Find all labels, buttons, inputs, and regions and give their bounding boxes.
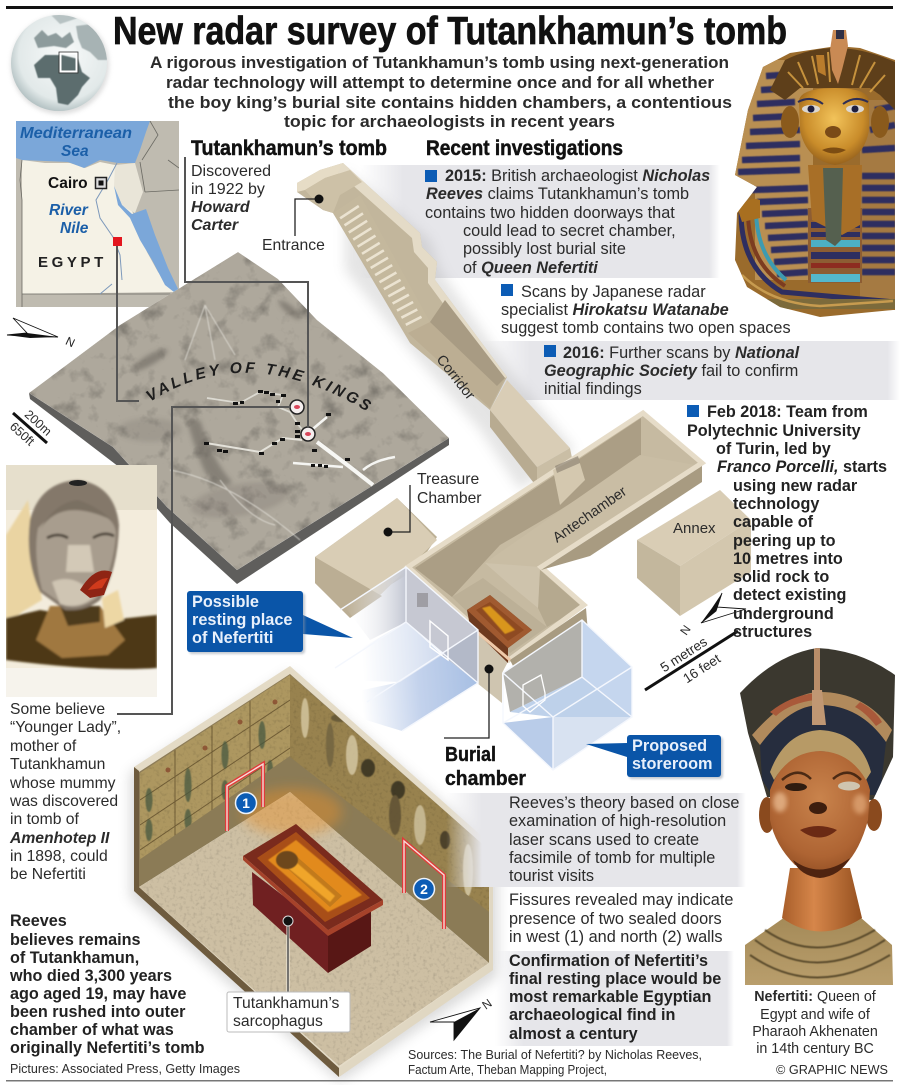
text: Feb 2018 team: structures <box>733 623 812 641</box>
icon: north arrow upper left: N <box>63 334 77 350</box>
text: fissures note: Fissures revealed may indicate <box>509 891 733 909</box>
headcloth top <box>770 48 895 110</box>
wall outer side <box>541 466 702 570</box>
text: theory note <box>509 794 740 885</box>
scale bar: tomb: 16 feet <box>680 651 723 686</box>
shaded corridor wall <box>430 300 505 386</box>
text: Feb 2018 team: Feb 2018: Team from <box>707 403 868 421</box>
text: discovered by Howard Carter: in 1922 by <box>191 181 265 198</box>
leader lines from heading and map to terrain <box>117 157 308 714</box>
text: Feb 2018 team: Polytechnic University <box>687 422 861 440</box>
door 2 <box>404 841 444 929</box>
text: Younger Lady note: Some believe <box>10 701 105 718</box>
text: Reeves believes: been rushed into outer <box>10 1003 186 1021</box>
text: theory note: Reeves’s theory based on close <box>509 794 740 812</box>
intro text: topic for archaeologists in recent years <box>284 113 615 131</box>
credit: pictures: Pictures: Associated Press, Getty Images <box>10 1062 240 1076</box>
icon: north arrow lower <box>430 996 495 1040</box>
credit: sources: Factum Arte, Theban Mapping Project, <box>408 1063 607 1077</box>
text: 2015 investigation: possibly lost burial site <box>463 240 626 258</box>
heading: Tutankhamun's tomb: Tutankhamun’s tomb <box>191 137 387 160</box>
chest collar <box>808 208 862 283</box>
text: Feb 2018 team: 10 metres into <box>733 550 843 568</box>
staircase <box>333 195 430 333</box>
diagram: tomb corridor <box>295 163 575 490</box>
scale bar: tomb: 5 metres <box>658 634 710 675</box>
text: 2015 investigation: Reeves claims Tutankhamun’s tomb <box>426 185 689 203</box>
neck <box>808 165 862 235</box>
text: 2015 investigation <box>425 167 710 277</box>
text: Reeves believes: chamber of what was <box>10 1021 174 1039</box>
caption: Nefertiti: in 14th century BC <box>756 1041 874 1057</box>
corridor outer wall <box>297 163 507 410</box>
text: Younger Lady note: Tutankhamun <box>10 756 105 773</box>
text: confirmation note: most remarkable Egyptian <box>509 988 711 1006</box>
text: 2015 investigation: could lead to secret chamber, <box>463 222 676 240</box>
cap band <box>770 730 871 780</box>
map labels: Sea <box>61 143 89 160</box>
callout: possible resting place of Nefertiti: of Nefertiti <box>192 629 273 647</box>
text: Younger Lady note: be Nefertiti <box>10 866 86 883</box>
left wall <box>139 674 290 887</box>
right wall <box>290 674 489 963</box>
burial floor front <box>477 630 510 703</box>
text: Feb 2018 team: underground <box>733 605 834 623</box>
text: Feb 2018 team: using new radar <box>733 477 858 495</box>
label: Annex: Annex <box>673 520 716 537</box>
map: Red Sea <box>114 186 179 296</box>
text: Younger Lady note: in tomb of <box>10 811 80 828</box>
caption: Nefertiti: Pharaoh Akhenaten <box>752 1024 878 1040</box>
icon: locator globe <box>11 12 109 114</box>
map labels: River <box>49 202 89 219</box>
map: Mediterranean Sea <box>16 121 150 168</box>
text: discovered by Howard Carter: Howard <box>191 199 251 216</box>
text: Watanabe scans: suggest tomb contains two open spaces <box>501 319 791 337</box>
text: Younger Lady note: whose mummy <box>9 775 116 792</box>
icon: north arrow upper left <box>7 318 77 350</box>
block passage <box>490 380 570 467</box>
map: Egypt land <box>22 160 175 294</box>
floor of tomb rooms <box>408 413 702 660</box>
caption: Nefertiti: Nefertiti: Queen of <box>754 989 876 1005</box>
text: theory note: facsimile of tomb for multiple <box>509 849 715 867</box>
scale bar: terrain: 200m <box>22 407 54 439</box>
map: Egypt locator <box>16 121 179 307</box>
text: Reeves believes <box>9 912 205 1057</box>
text: Watanabe scans: Scans by Japanese radar <box>521 283 706 301</box>
intro text: the boy king’s burial site contains hidden chambers, a contentious <box>168 94 732 112</box>
text: Feb 2018 team: Franco Porcelli, starts <box>717 458 887 476</box>
text: theory note: laser scans used to create <box>509 831 699 849</box>
text: theory note: examination of high-resolution <box>509 812 726 830</box>
text: Feb 2018 team: detect existing <box>733 586 846 604</box>
annex side wall <box>485 455 695 568</box>
text: fissures note: presence of two sealed doors <box>509 910 722 928</box>
callout: possible resting place of Nefertiti: Possible <box>192 593 259 611</box>
text: confirmation note: final resting place would be <box>509 970 721 988</box>
photo: Nefertiti bust <box>738 645 898 985</box>
text: discovered by Howard Carter: Carter <box>191 217 239 234</box>
label: Burial chamber: Burial <box>445 744 496 766</box>
text: Younger Lady note <box>9 701 121 883</box>
label dot: Entrance <box>295 194 324 236</box>
text: Younger Lady note: in 1898, could <box>10 848 108 865</box>
text: 2016 scans <box>544 344 800 398</box>
text: Feb 2018 team: of Turin, led by <box>716 440 831 458</box>
intro text <box>150 54 732 131</box>
diagram: antechamber <box>408 413 702 703</box>
icon: north arrow right <box>677 593 746 638</box>
cobra and vulture <box>816 30 848 84</box>
text: Feb 2018 team <box>687 403 887 641</box>
text: Younger Lady note: Amenhotep II <box>9 830 110 847</box>
credit: sources <box>408 1048 702 1077</box>
eyes and lips <box>773 773 867 838</box>
text: Feb 2018 team: peering up to <box>733 532 836 550</box>
room floor <box>139 792 489 1066</box>
label: Burial chamber <box>444 664 526 790</box>
credit: sources: Sources: The Burial of Nefertiti? by Nicholas Reeves, <box>408 1048 702 1062</box>
label: Valley of the Kings <box>150 373 395 430</box>
bottom rule <box>6 1080 893 1082</box>
panel: terrain block Valley of the Kings: VALLEY OF THE KINGS <box>146 362 372 410</box>
text: confirmation note: Confirmation of Nefertiti’s <box>509 952 708 970</box>
text: confirmation note: almost a century <box>509 1025 638 1043</box>
callout: possible resting place of Nefertiti: resting place <box>192 611 292 629</box>
label: Treasure Chamber: Chamber <box>417 490 482 507</box>
text: discovered by Howard Carter <box>191 163 271 234</box>
callout: proposed storeroom: storeroom <box>632 755 713 773</box>
label: Treasure Chamber: Treasure <box>417 471 479 488</box>
callout: proposed storeroom <box>586 735 723 779</box>
panel: terrain block Valley of the Kings <box>29 252 449 584</box>
text: Younger Lady note: “Younger Lady”, <box>10 719 121 736</box>
far wall <box>415 418 641 597</box>
sarcophagus, small <box>467 595 532 663</box>
text: 2015 investigation: of Queen Nefertiti <box>463 259 598 277</box>
face <box>770 751 870 870</box>
photo: Tutankhamun golden mask <box>733 30 900 320</box>
diagram: annex block <box>637 490 751 616</box>
door 1: 1 <box>242 795 250 811</box>
text: Reeves believes: believes remains <box>10 931 140 949</box>
label: Antechamber: Antechamber <box>550 484 630 546</box>
text: confirmation note <box>509 952 721 1043</box>
map labels <box>20 125 132 271</box>
tomb tracks and markers <box>204 390 395 485</box>
caption: Nefertiti: Egypt and wife of <box>760 1007 870 1023</box>
text: Feb 2018 team: capable of <box>733 513 814 531</box>
text: 2015 investigation: contains two hidden doorways that <box>425 204 675 222</box>
wall rim <box>408 413 702 660</box>
top rule <box>6 6 893 9</box>
text: confirmation note: archaeological find in <box>509 1006 675 1024</box>
corridor floor <box>408 322 505 408</box>
map labels: Mediterranean <box>20 125 132 142</box>
label: Tutankhamun's sarcophagus <box>227 916 350 1032</box>
label: Tutankhamun's sarcophagus: Tutankhamun’s <box>233 995 340 1012</box>
text: Younger Lady note: mother of <box>10 738 77 755</box>
label: Tutankhamun's sarcophagus: sarcophagus <box>233 1013 323 1030</box>
text: discovered by Howard Carter: Discovered <box>191 163 271 180</box>
door 2: 2 <box>420 881 428 897</box>
text: fissures note: in west (1) and north (2) walls <box>509 928 723 946</box>
panel: grey text bands <box>446 793 746 1046</box>
text: theory note: tourist visits <box>509 867 594 885</box>
scale bar: tomb <box>645 631 738 690</box>
burial room floor <box>452 578 547 653</box>
text: 2016 scans: initial findings <box>544 380 642 398</box>
text: Watanabe scans: specialist Hirokatsu Watanabe <box>501 301 729 319</box>
title: New radar survey of Tutankhamun’s tomb <box>113 10 787 53</box>
intro text: radar technology will attempt to determine once and for all whether <box>166 74 715 92</box>
map labels: Nile <box>60 220 89 237</box>
diagram: treasure chamber block <box>315 498 437 618</box>
text: Reeves believes: ago aged 19, may have <box>10 985 186 1003</box>
room dark outer edge <box>134 767 339 1077</box>
mask face <box>781 88 889 246</box>
caption: Nefertiti <box>752 989 878 1057</box>
door 1 <box>227 764 263 831</box>
text: 2016 scans: Geographic Society fail to confirm <box>544 362 798 380</box>
text: Younger Lady note: was discovered <box>9 793 118 810</box>
callout: possible resting place of Nefertiti <box>187 591 353 654</box>
text: fissures note <box>509 891 733 946</box>
label: Burial chamber: chamber <box>445 768 526 790</box>
panel: grey bands behind investigations <box>360 165 900 400</box>
text: Reeves believes: who died 3,300 years <box>9 967 172 985</box>
text: Watanabe scans <box>501 283 791 337</box>
label: Entrance: Entrance <box>262 237 325 254</box>
map labels: Cairo <box>48 175 88 192</box>
photo: mummy of the Younger Lady <box>6 465 157 697</box>
intro text: A rigorous investigation of Tutankhamun’s tomb using next-generation <box>150 54 729 72</box>
map: Sinai <box>114 163 143 213</box>
diagram: burial chamber cutaway room <box>130 660 500 1082</box>
text: Feb 2018 team: solid rock to <box>733 568 829 586</box>
text: Reeves believes: of Tutankhamun, <box>10 949 139 967</box>
icon: north arrow right: N <box>677 623 694 638</box>
text: 2015 investigation: 2015: British archaeologist Nicholas <box>445 167 710 185</box>
map labels: EGYPT <box>38 254 107 271</box>
diagram: proposed storeroom glass box <box>503 620 632 770</box>
icon: north arrow lower: N <box>479 996 495 1012</box>
doorway <box>553 457 585 505</box>
credit: Graphic News: © GRAPHIC NEWS <box>776 1063 888 1077</box>
text: Feb 2018 team: technology <box>733 495 819 513</box>
text: Reeves believes: Reeves <box>10 912 67 930</box>
heading: Recent investigations: Recent investigations <box>426 137 623 160</box>
text: Reeves believes: originally Nefertiti’s tomb <box>10 1039 205 1057</box>
diagram: possible resting place glass box <box>335 567 478 731</box>
label: Treasure Chamber <box>384 471 482 536</box>
shoulders and collar <box>745 917 893 985</box>
scale bar: terrain: 650ft <box>7 419 37 449</box>
sarcophagus body <box>242 788 383 973</box>
scale bar: terrain <box>7 407 54 449</box>
callout: proposed storeroom: Proposed <box>632 737 707 755</box>
text: 2016 scans: 2016: Further scans by National <box>563 344 800 362</box>
crown <box>738 645 898 805</box>
label: Corridor: Corridor <box>433 352 478 403</box>
